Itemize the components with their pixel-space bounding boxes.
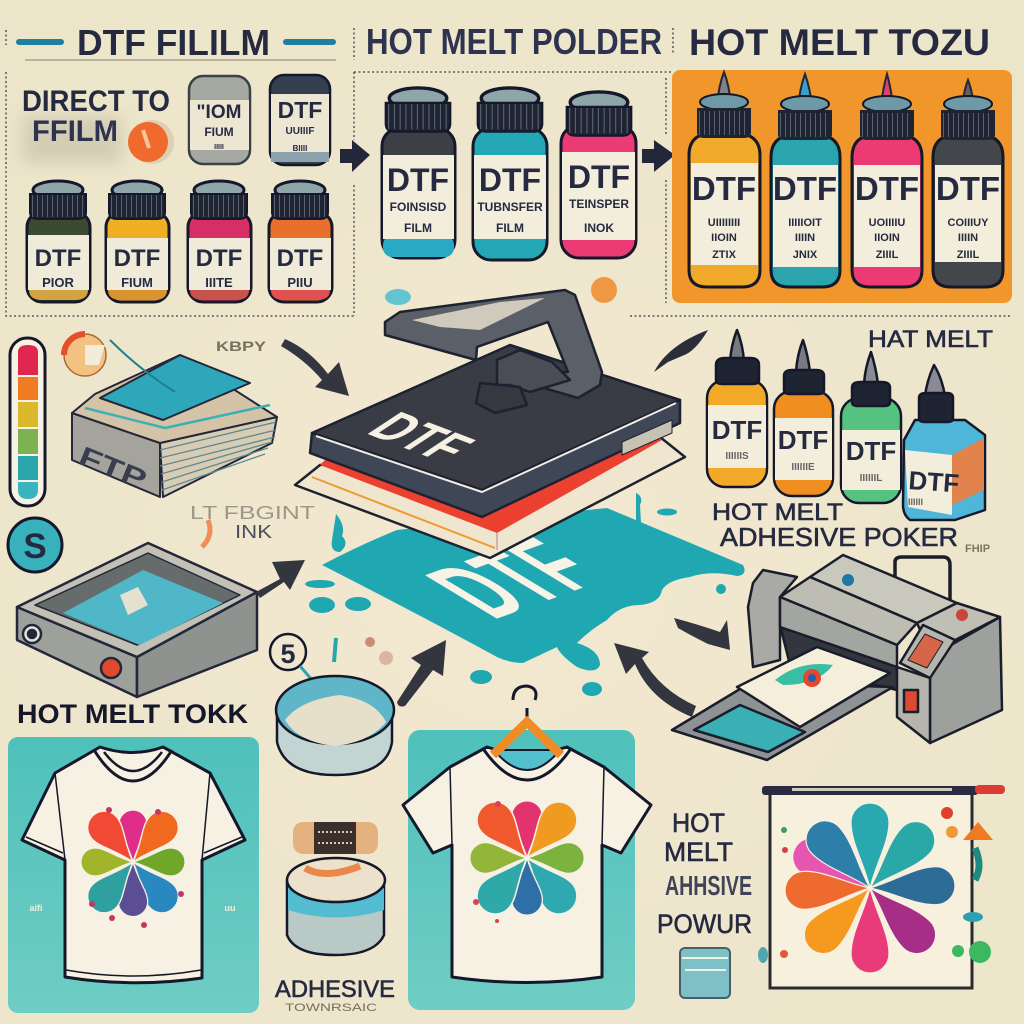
- jar: teal transfer film: TUBNSFER: [477, 200, 543, 214]
- text block: direct to film: [22, 85, 170, 163]
- arrow: bottles to press: [654, 330, 708, 372]
- smudge arrow: [674, 618, 730, 650]
- hanger: [493, 686, 561, 755]
- bottle: green: [841, 352, 901, 503]
- panel: left t-shirt: uu: [224, 903, 236, 913]
- jar: teal transfer film: FILM: [496, 221, 524, 235]
- label: hot melt adhesive poker: [712, 499, 958, 552]
- jar: magenta: DTF: [196, 245, 242, 272]
- label: adhesive: ADHESIVE: [275, 976, 395, 1003]
- bottle: teal: JNIX: [793, 249, 818, 261]
- icon: orange badge: [64, 334, 106, 376]
- jar: magenta: IIITE: [205, 275, 233, 290]
- flower print: [81, 804, 185, 920]
- text block: direct to film: FFILM: [32, 115, 118, 148]
- jar: grey: FIUM: [204, 125, 234, 139]
- jar: dark: UUIIIF: [286, 126, 314, 137]
- bottle: yellow: ZTIX: [712, 249, 737, 261]
- bottle: green: DTF: [846, 436, 896, 466]
- jar: olive: PIOR: [42, 275, 74, 290]
- bottle: blue box: IIIIII: [908, 497, 923, 507]
- bottle: blue box: DTF: [908, 465, 960, 499]
- jar: yellow: DTF: [114, 245, 160, 272]
- jar: dark: [270, 75, 330, 165]
- jar: grey: IIIII: [214, 144, 224, 151]
- jar: dark transfer film: [382, 88, 455, 258]
- jar: olive: [27, 181, 90, 302]
- bottle: yellow: UIIIIIIII: [708, 217, 740, 229]
- jar: dark transfer film: FOINSISD: [390, 200, 447, 214]
- bottle: pink: IIOIN: [874, 232, 900, 244]
- illustration: film stack: [72, 340, 277, 497]
- bottle: dark: COIIIUY: [948, 217, 989, 229]
- label: hot melt adhesive poker: ADHESIVE POKER: [720, 522, 958, 552]
- label: hot melt adhesive poker: HOT MELT: [712, 499, 843, 526]
- bottle: dark: DTF: [936, 170, 1000, 207]
- label: stack text: FTP: [75, 441, 151, 495]
- bottle: orange: DTF: [778, 425, 828, 455]
- heading: hot melt polder: HOT MELT POLDER: [366, 21, 662, 62]
- jar: dark: BIIII: [293, 144, 307, 153]
- label: hot melt adhesive powur: MELT: [664, 837, 733, 867]
- arrow: stack to press: [281, 339, 349, 396]
- bottle: yellow: DTF: [692, 170, 756, 207]
- text: FHIP: [965, 543, 990, 555]
- bottle: teal: [771, 74, 840, 287]
- panel: left t-shirt: aifi: [29, 903, 43, 913]
- bottle: green: IIIIIIL: [860, 473, 882, 484]
- heading: hot melt tozu: HOT MELT TOZU: [689, 22, 990, 63]
- heading: DTF film: DTF FILILM: [77, 22, 270, 63]
- jar row: small DTF film jars: [27, 181, 332, 302]
- label: hot melt adhesive powur: HOT: [672, 808, 725, 838]
- icon: label band: [293, 822, 378, 854]
- jar: orange: [269, 181, 332, 302]
- bottle: dark: ZIIIL: [957, 249, 980, 261]
- bottle: orange: [774, 340, 833, 496]
- jar: teal transfer film: [473, 88, 547, 260]
- jar: pink transfer ink: TEINSPER: [569, 197, 629, 211]
- printer tray: [672, 647, 893, 760]
- flower print: [470, 795, 584, 921]
- bottle: pink: ZIIIL: [876, 249, 899, 261]
- icon: small tub: [680, 948, 730, 998]
- panel: center t-shirt: [403, 686, 651, 1010]
- label: melt print ink: LT FBGINT: [190, 503, 315, 523]
- label: adhesive: TOWNRSAIC: [285, 1002, 377, 1014]
- bottle: teal: IIIIIOIT: [788, 217, 822, 229]
- bottle: dark: [933, 80, 1003, 287]
- bottle: teal: IIIIN: [795, 232, 815, 244]
- badge: number five: 5: [280, 639, 296, 669]
- icon: orange blob: [128, 120, 174, 164]
- jar: teal transfer film: DTF: [479, 162, 541, 198]
- panel: left t-shirt: [8, 737, 259, 1013]
- jar: orange: DTF: [277, 245, 323, 272]
- flower print: [784, 803, 956, 973]
- icon: thermometer scale: [10, 338, 45, 506]
- jar: yellow: [106, 181, 169, 302]
- text block: direct to film: DIRECT TO: [22, 85, 170, 118]
- label: melt print ink: INK: [235, 522, 272, 542]
- jar: olive: DTF: [35, 245, 81, 272]
- heading: DTF film: [16, 22, 336, 63]
- panel: printed poster: [758, 785, 1005, 988]
- arrow: printer to puddle: [614, 643, 696, 717]
- illustration: heat press: [295, 290, 685, 558]
- label: melt print ink: [190, 503, 315, 547]
- bottle: amber: [707, 330, 767, 487]
- illustration: tank heater: [17, 543, 257, 697]
- bottle: blue box: [903, 365, 985, 520]
- jar: pink transfer ink: DTF: [568, 159, 630, 195]
- illustration: DTF printer: [672, 555, 1002, 760]
- jar: orange: PIIU: [287, 275, 313, 290]
- bottle: amber: IIIIIIS: [725, 451, 749, 462]
- label: hot melt adhesive powur: [657, 808, 752, 939]
- bottles: hot melt adhesive: [707, 330, 985, 520]
- jar: yellow: FIUM: [121, 275, 153, 290]
- arrow: powder to puddle: [397, 640, 446, 706]
- label: hot melt adhesive powur: AHHSIVE: [665, 870, 752, 901]
- bottle: pink: [852, 74, 922, 287]
- label: hot melt tokk: HOT MELT TOKK: [17, 699, 249, 729]
- badge: step marker: S: [23, 527, 47, 566]
- bottle: dark: IIIIN: [958, 232, 978, 244]
- jar: magenta: [188, 181, 251, 302]
- press plate: [310, 345, 680, 517]
- illustration: lower adhesive jar: [287, 858, 385, 955]
- arrow: film to powder: [340, 140, 370, 172]
- illustration: powder bowl: [276, 676, 394, 775]
- label: puddle DTF: DTF: [399, 522, 629, 634]
- label: hat melt: HAT MELT: [868, 326, 993, 353]
- bottle: amber: DTF: [712, 415, 762, 445]
- badge: number five: [270, 634, 312, 680]
- panel: orange bottles: [672, 70, 1012, 303]
- jar: pink transfer ink: [561, 92, 636, 258]
- badge: step marker: [8, 518, 62, 572]
- bottle: yellow: [689, 72, 760, 287]
- label: press DTF: DTF: [355, 404, 488, 470]
- press arm: [385, 290, 602, 413]
- bottle: pink: DTF: [855, 170, 919, 207]
- label: hot melt adhesive powur: POWUR: [657, 909, 752, 939]
- jar: grey: "IOM: [197, 102, 241, 123]
- bottle: yellow: IIOIN: [711, 232, 737, 244]
- press layers: [295, 430, 685, 558]
- jar: pink transfer ink: INOK: [584, 221, 614, 235]
- bottle: pink: UOIIIIU: [869, 217, 905, 229]
- bottle: orange: IIIIIIE: [791, 462, 815, 473]
- jar: dark transfer film: DTF: [387, 162, 449, 198]
- arrow: powder to tozu: [642, 140, 675, 172]
- bottle: teal: DTF: [773, 170, 837, 207]
- jar: dark: DTF: [278, 97, 322, 123]
- illustration: teal ink puddle: [305, 493, 745, 696]
- jar: grey: [189, 76, 250, 164]
- small label: kbpy: KBPY: [216, 338, 267, 354]
- arrow: heater to puddle: [256, 560, 305, 598]
- jar: dark transfer film: FILM: [404, 221, 432, 235]
